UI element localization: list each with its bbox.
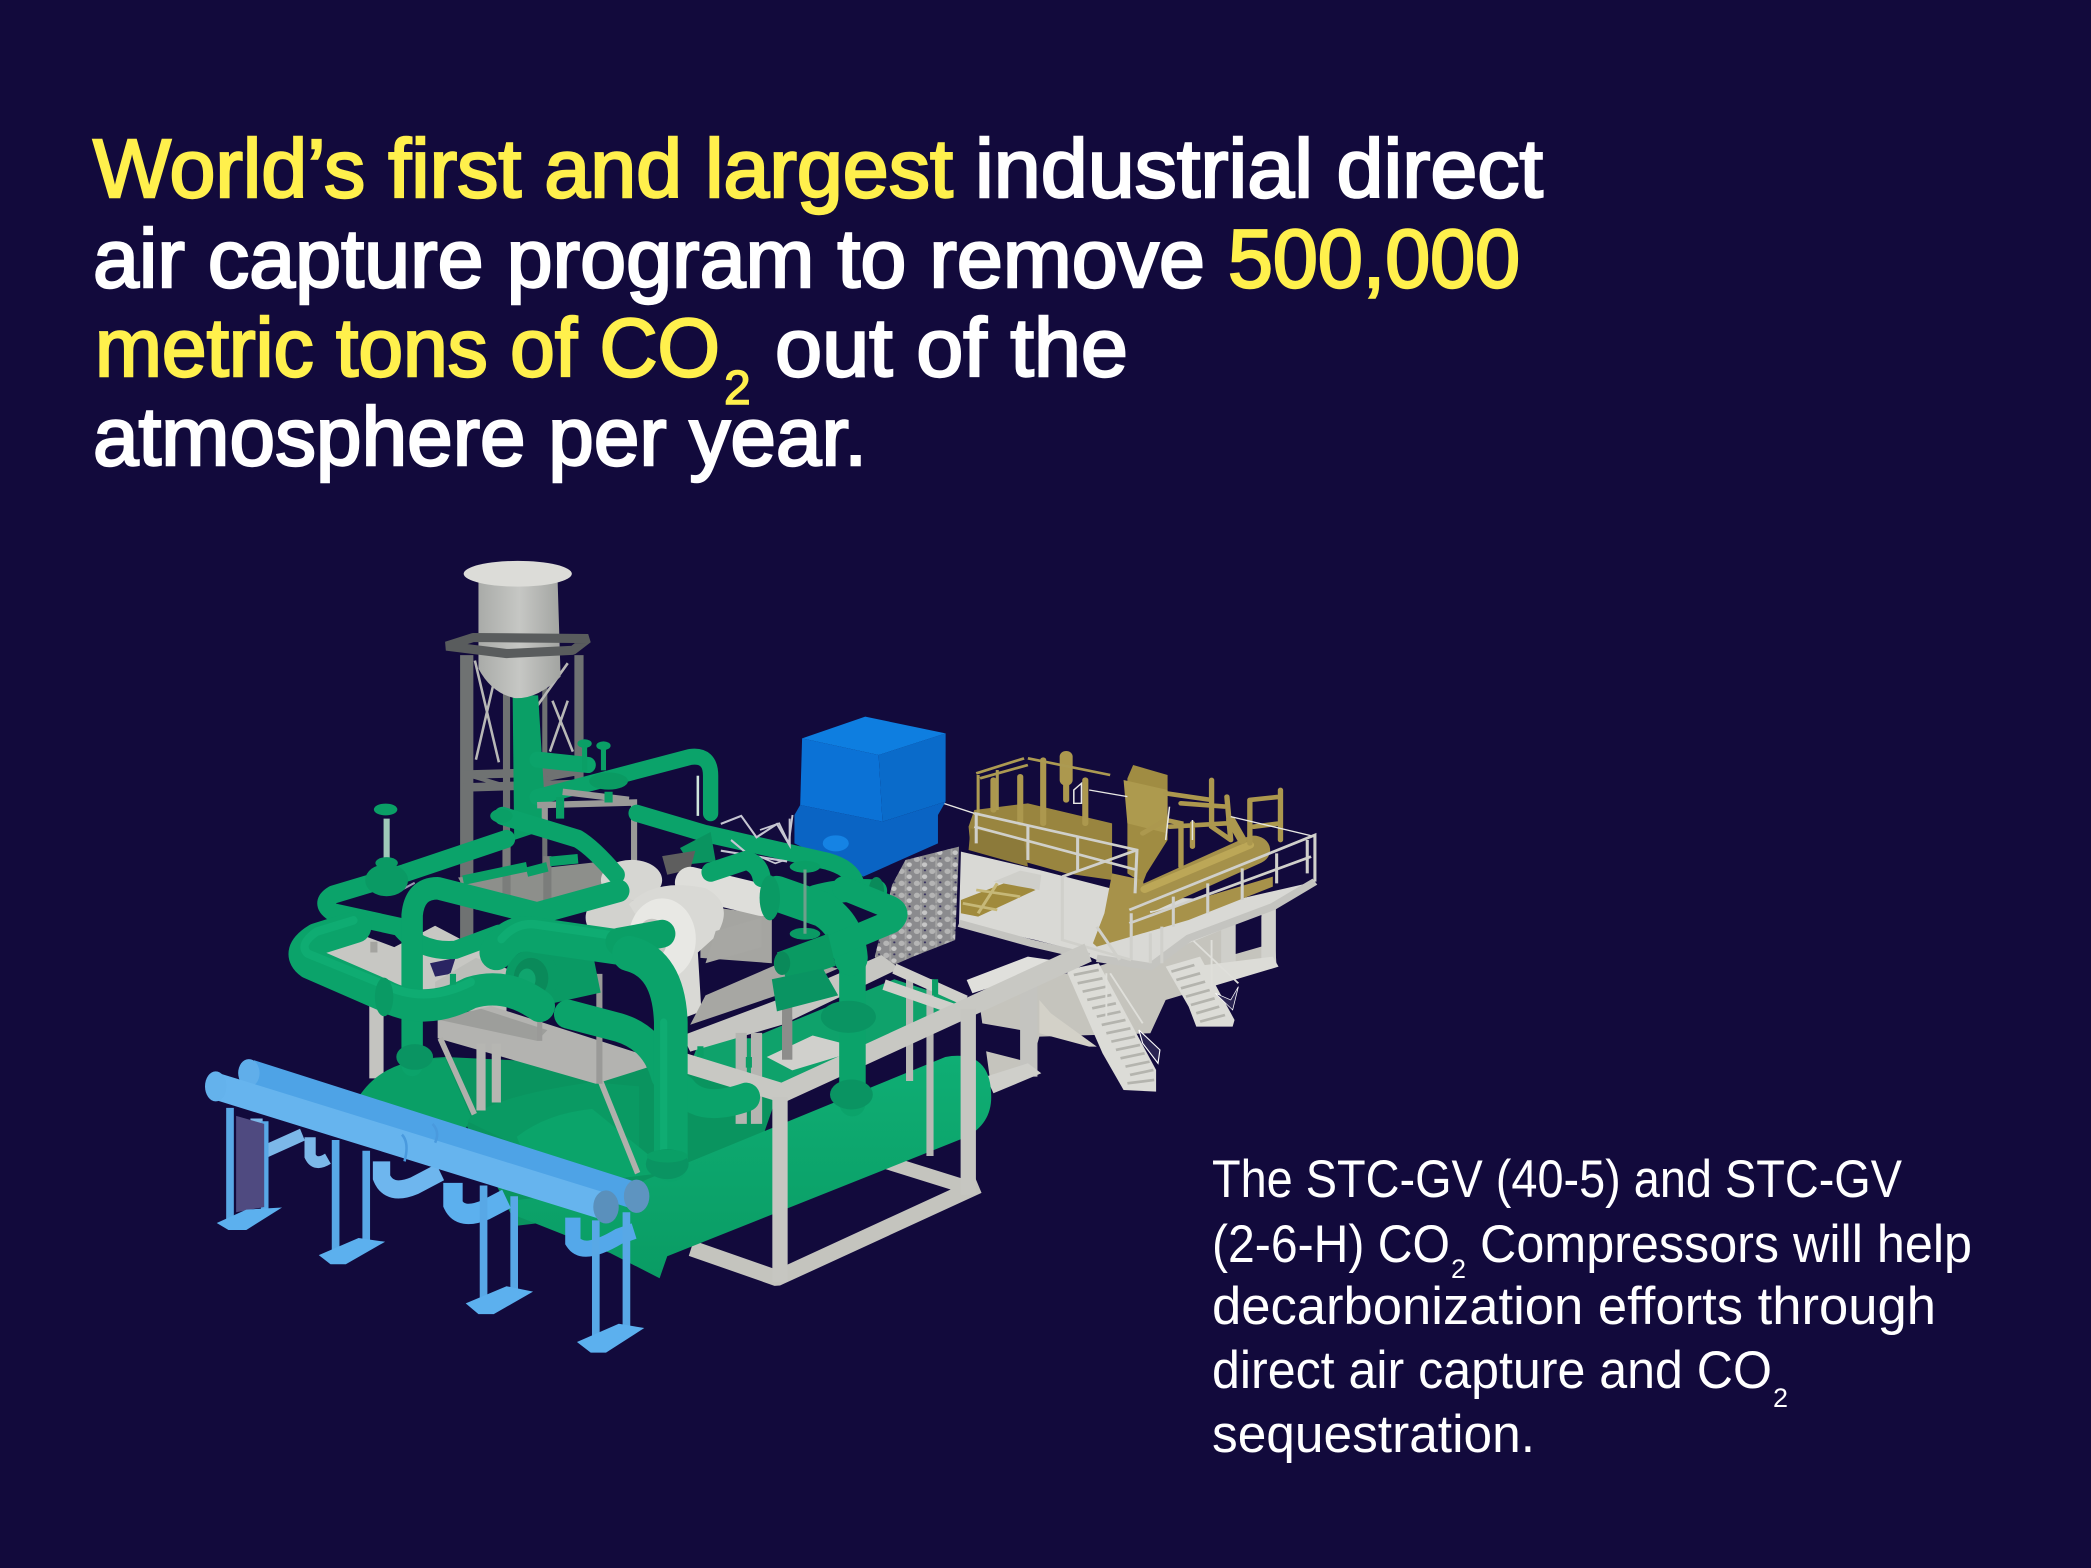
back railing xyxy=(976,758,1110,813)
back header xyxy=(250,1073,637,1196)
staircase left xyxy=(1066,963,1160,1092)
machine: right skid with motor and yellow package xyxy=(760,717,1315,1093)
title: 500,000 xyxy=(1228,212,1520,305)
yellow pipework xyxy=(993,755,1280,867)
electric motor xyxy=(794,717,946,877)
back green pipes and valves xyxy=(537,739,856,883)
title: out of the xyxy=(775,301,1128,394)
small back pipes xyxy=(463,859,578,880)
upper frame beam and legs xyxy=(683,952,1088,1282)
title xyxy=(93,122,1543,483)
grey support structure xyxy=(940,907,1279,1093)
blue pipe system xyxy=(205,1059,649,1353)
lower frame bars xyxy=(691,1161,978,1278)
grey beam under piping xyxy=(438,974,647,1173)
grey skid behind piping xyxy=(323,840,772,1078)
upper large pipe xyxy=(496,924,662,952)
machine: left compressor skid xyxy=(205,561,1088,1353)
body text: 2 xyxy=(1451,1254,1466,1284)
back legs and bracing xyxy=(463,655,583,985)
body text: (2-6-H) CO xyxy=(1212,1215,1450,1274)
middle pipe with elbow xyxy=(396,888,619,1070)
body text: The STC-GV (40-5) and STC-GV xyxy=(1212,1150,1903,1209)
white accents xyxy=(944,783,1315,840)
title: industrial direct xyxy=(975,122,1543,215)
vent valve xyxy=(374,804,398,869)
frame ring xyxy=(446,637,588,654)
green vessels xyxy=(359,1057,782,1226)
yellow hatch xyxy=(961,880,1036,917)
body text xyxy=(1212,1150,1972,1464)
small instrument valves xyxy=(453,974,935,1068)
body text: Compressors will help xyxy=(1480,1215,1972,1274)
front header xyxy=(217,1086,606,1207)
title: atmosphere per year. xyxy=(93,390,867,483)
stack duct xyxy=(513,695,546,840)
body text: 2 xyxy=(1773,1383,1788,1413)
front railings xyxy=(974,813,1315,963)
big U pipe xyxy=(629,954,689,1179)
drain legs and elbows xyxy=(230,1108,634,1341)
white deck xyxy=(959,852,1315,963)
center supports and pedestal xyxy=(683,955,976,1156)
title: 2 xyxy=(724,362,751,415)
title: World’s first and largest xyxy=(93,122,953,215)
flanged pipe assembly xyxy=(711,860,896,1109)
body text: direct air capture and CO xyxy=(1212,1341,1772,1400)
lower pipe to vessel xyxy=(568,1014,746,1104)
nozzle cylinder xyxy=(506,950,596,1003)
upper left pipe loop xyxy=(326,804,616,950)
white compressor xyxy=(586,860,762,1018)
title: metric tons of CO xyxy=(95,301,720,394)
yellow tank block xyxy=(969,803,1112,880)
title: air capture program to remove xyxy=(93,212,1205,305)
hopper and drum xyxy=(478,579,561,698)
staircase right xyxy=(1166,940,1238,1027)
body text: decarbonization efforts through xyxy=(1212,1277,1936,1336)
big horizontal vessel xyxy=(517,1056,991,1278)
instrument rack xyxy=(875,847,959,970)
feet xyxy=(217,1207,644,1353)
body text: sequestration. xyxy=(1212,1405,1535,1464)
yellow horizontal vessel xyxy=(1093,845,1273,947)
right grey beams xyxy=(690,918,838,1025)
back railing right xyxy=(721,816,790,861)
left back railing xyxy=(760,815,794,863)
stack tower xyxy=(446,561,588,985)
deck outer edge xyxy=(959,882,1315,967)
hood cap xyxy=(464,561,572,587)
large front pipe xyxy=(304,920,540,1016)
yellow cabinet xyxy=(1124,765,1168,883)
